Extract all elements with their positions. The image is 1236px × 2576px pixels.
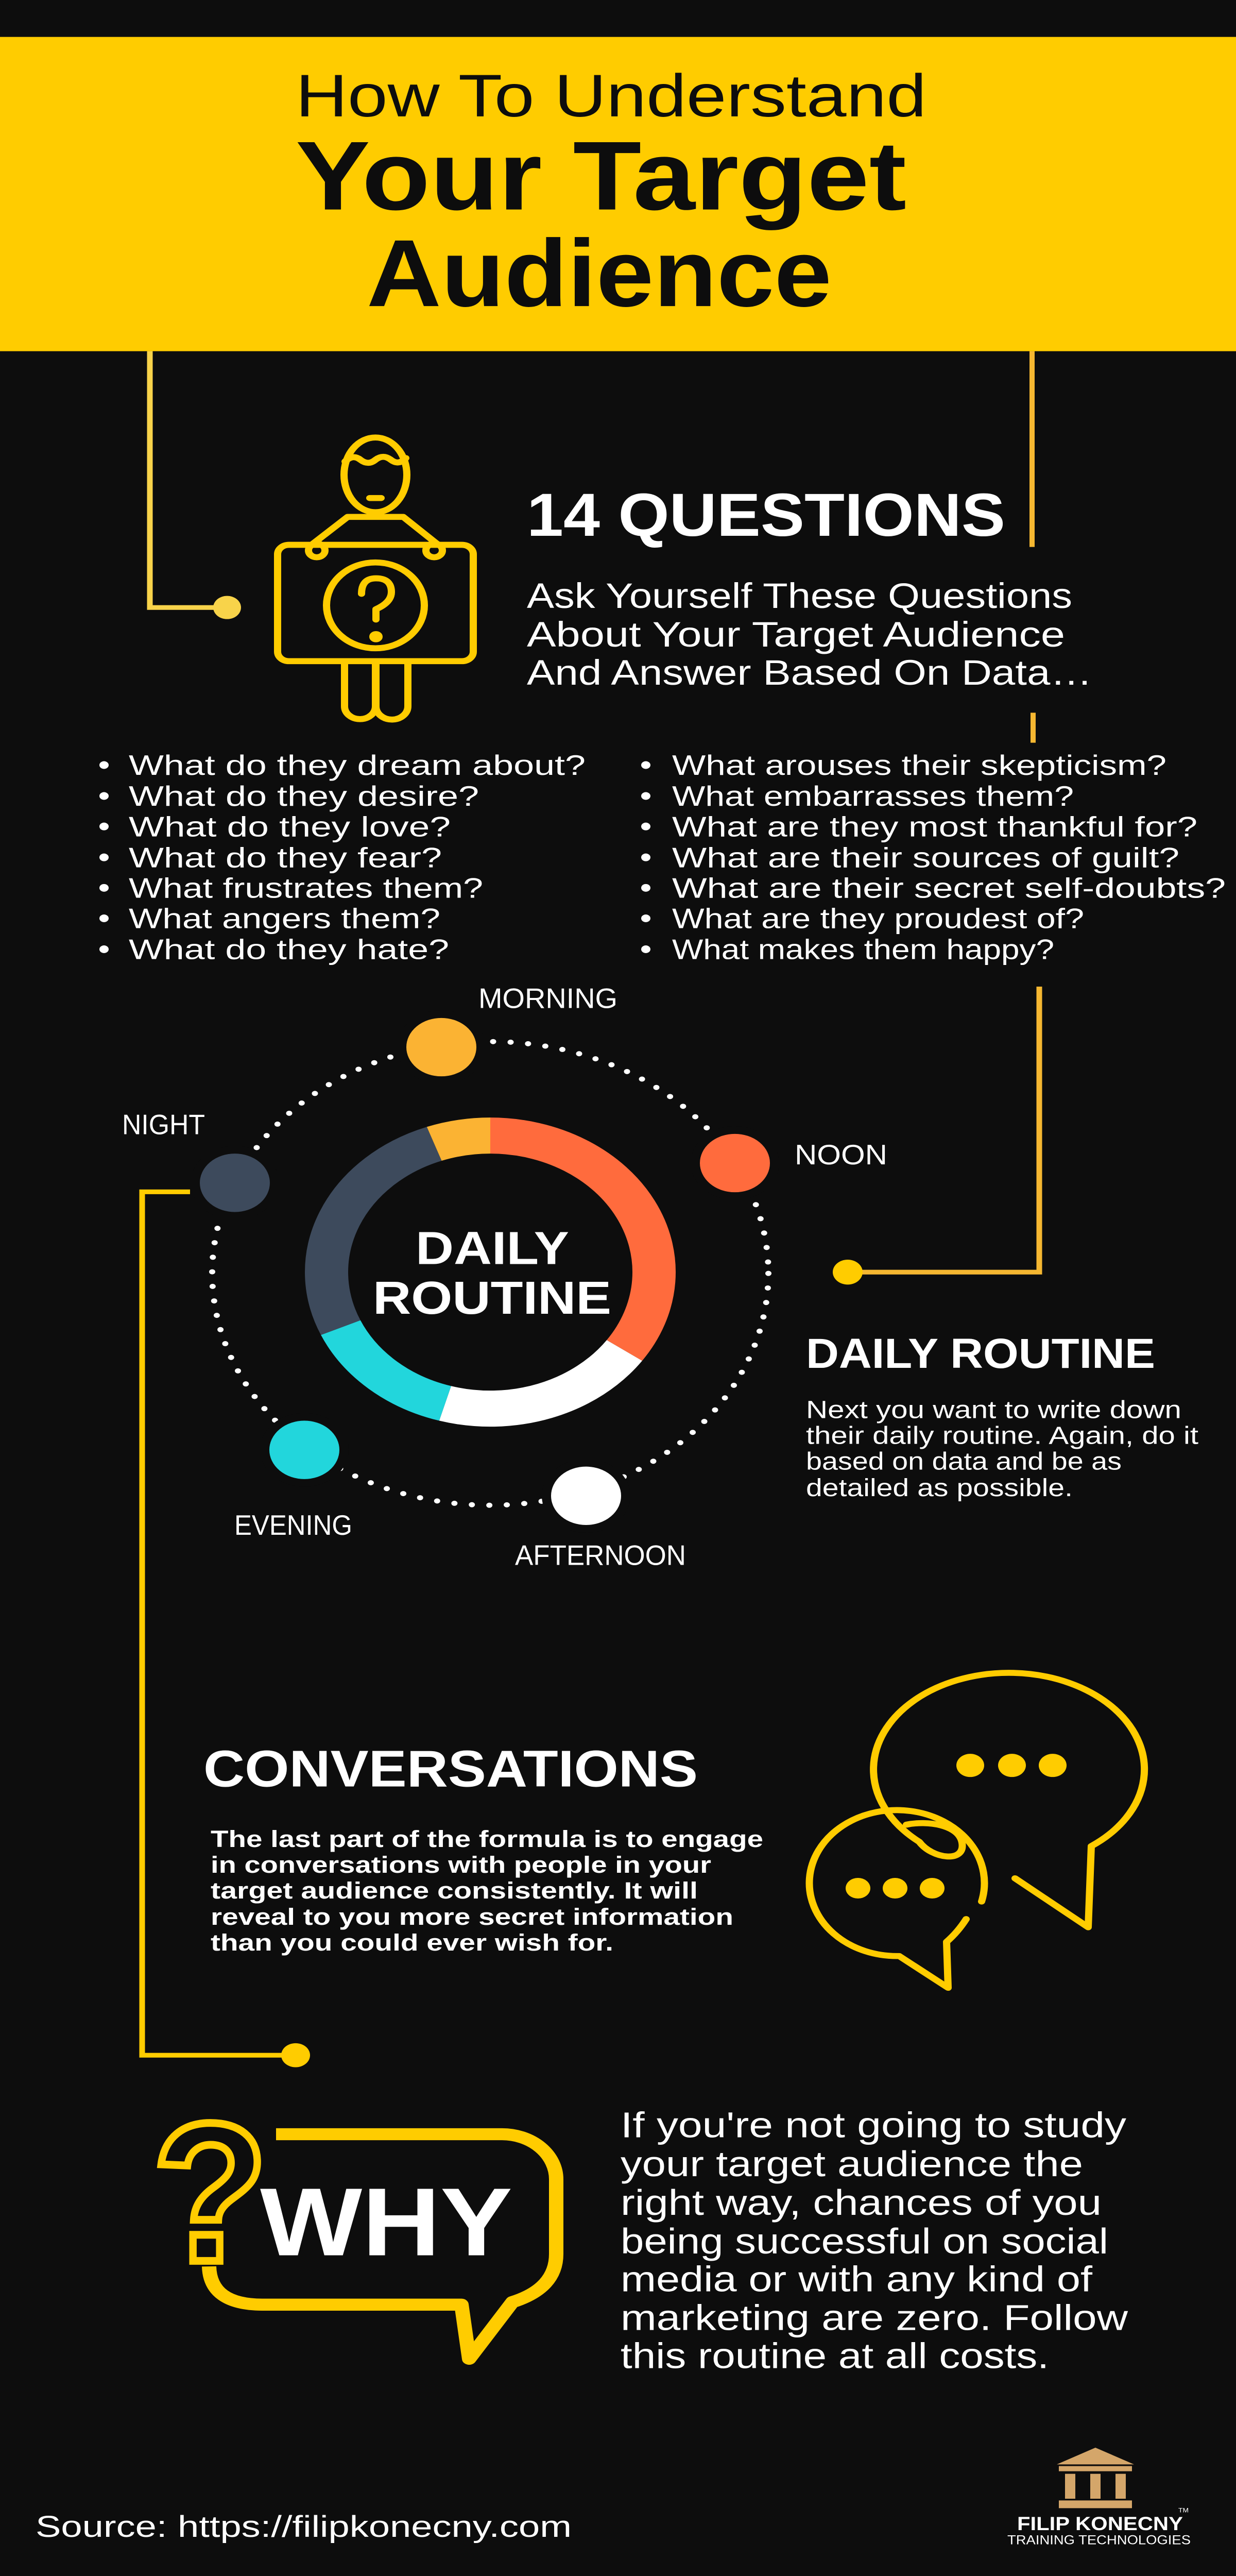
question list: left column: What angers them? <box>129 903 440 934</box>
text: daily routine description: their daily routine. Again, do it <box>806 1422 1198 1449</box>
connector line: questions to daily routine <box>833 987 1039 1284</box>
question mark: ? <box>152 2082 268 2303</box>
text: conversations description: reveal to you more secret information <box>211 1904 733 1930</box>
question list: right column: What makes them happy? <box>672 934 1054 965</box>
node: afternoon: AFTERNOON <box>515 1539 686 1571</box>
text: why paragraph: If you're not going to study <box>621 2105 1126 2145</box>
footer: source: Source: https://filipkonecny.com <box>36 2510 572 2544</box>
text: conversations description: than you could ever wish for. <box>211 1929 613 1956</box>
text: daily routine description: detailed as possible. <box>806 1475 1073 1502</box>
connector line: right orange segments <box>1032 351 1033 743</box>
question list: right column: What are their sources of guilt? <box>672 842 1179 873</box>
node: noon: NOON <box>795 1139 887 1171</box>
question list: left column: What frustrates them? <box>129 872 483 904</box>
big bubble <box>873 1673 1144 1927</box>
text: why paragraph: right way, chances of you <box>621 2183 1102 2223</box>
title line 2: Your Target <box>296 122 906 230</box>
icon: speech bubbles <box>810 1673 1144 1988</box>
text: daily routine description <box>806 1396 1198 1502</box>
small bubble <box>810 1810 985 1988</box>
text: conversations description: The last part of the formula is to engage <box>211 1826 763 1852</box>
text: why paragraph: this routine at all costs. <box>621 2336 1049 2376</box>
question list: right column <box>641 749 1226 965</box>
chart: daily routine cycle <box>122 982 887 1571</box>
text: conversations description: target audience consistently. It will <box>211 1877 698 1904</box>
icon: building <box>1057 2448 1134 2508</box>
heading: daily routine: DAILY ROUTINE <box>806 1330 1155 1377</box>
node: night: NIGHT <box>122 1109 205 1140</box>
text: why paragraph: media or with any kind of <box>621 2259 1093 2299</box>
logo: filip konecny: TM <box>1178 2507 1189 2514</box>
why word: WHY <box>260 2168 512 2276</box>
text: why paragraph <box>621 2105 1128 2376</box>
text: why paragraph: marketing are zero. Follow <box>621 2298 1128 2338</box>
node: evening: EVENING <box>234 1509 352 1541</box>
icon: person holding question sign <box>278 437 473 720</box>
donut ring <box>327 1136 654 1409</box>
node: morning <box>402 982 617 1080</box>
header banner <box>0 37 1236 351</box>
text: why paragraph: being successful on social <box>621 2222 1108 2262</box>
node: noon <box>695 1130 887 1196</box>
node: afternoon <box>515 1463 686 1571</box>
logo: filip konecny: TRAINING TECHNOLOGIES <box>1007 2533 1191 2547</box>
logo: filip konecny <box>1007 2448 1191 2547</box>
question list: left column: What do they love? <box>129 811 451 842</box>
question list: left column: What do they hate? <box>129 934 449 965</box>
question list: left column <box>99 749 586 965</box>
text: why paragraph: your target audience the <box>621 2144 1083 2184</box>
question list: left column: What do they fear? <box>129 842 442 873</box>
subtitle: ask yourself <box>527 576 1092 692</box>
question list: left column: What do they dream about? <box>129 749 586 781</box>
text: daily routine description: Next you want to write down <box>806 1396 1181 1423</box>
icon: why speech bubble with question mark <box>152 2082 556 2359</box>
title line 1: How To Understand <box>296 62 926 129</box>
connector line: night to conversations <box>142 1192 310 2067</box>
logo: filip konecny: FILIP KONECNY <box>1017 2513 1183 2534</box>
question list: right column: What are they proudest of? <box>672 903 1084 934</box>
node: morning: MORNING <box>478 982 617 1014</box>
connector line: header to 14 questions <box>150 351 241 619</box>
subtitle: ask yourself: About Your Target Audience <box>527 615 1065 654</box>
question list: right column: What arouses their skepticism? <box>672 749 1166 781</box>
question list: right column: What are their secret self-doubts? <box>672 872 1226 904</box>
question list: right column: What embarrasses them? <box>672 780 1074 812</box>
subtitle: ask yourself: And Answer Based On Data… <box>527 653 1092 692</box>
dotted orbit <box>212 1042 768 1505</box>
title line 3: Audience <box>367 221 832 327</box>
question list: left column: What do they desire? <box>129 780 479 812</box>
node: night <box>122 1109 274 1216</box>
center label: ROUTINE <box>373 1272 611 1324</box>
text: daily routine description: based on data and be as <box>806 1448 1122 1475</box>
node: evening <box>234 1417 352 1541</box>
heading: 14 questions: 14 QUESTIONS <box>527 481 1005 549</box>
center label: DAILY <box>416 1223 569 1274</box>
center label <box>373 1223 611 1324</box>
subtitle: ask yourself: Ask Yourself These Questions <box>527 576 1072 615</box>
heading: conversations: CONVERSATIONS <box>203 1740 698 1798</box>
text: conversations description <box>211 1826 763 1956</box>
text: conversations description: in conversations with people in your <box>211 1852 711 1878</box>
question list: right column: What are they most thankful for? <box>672 811 1197 842</box>
